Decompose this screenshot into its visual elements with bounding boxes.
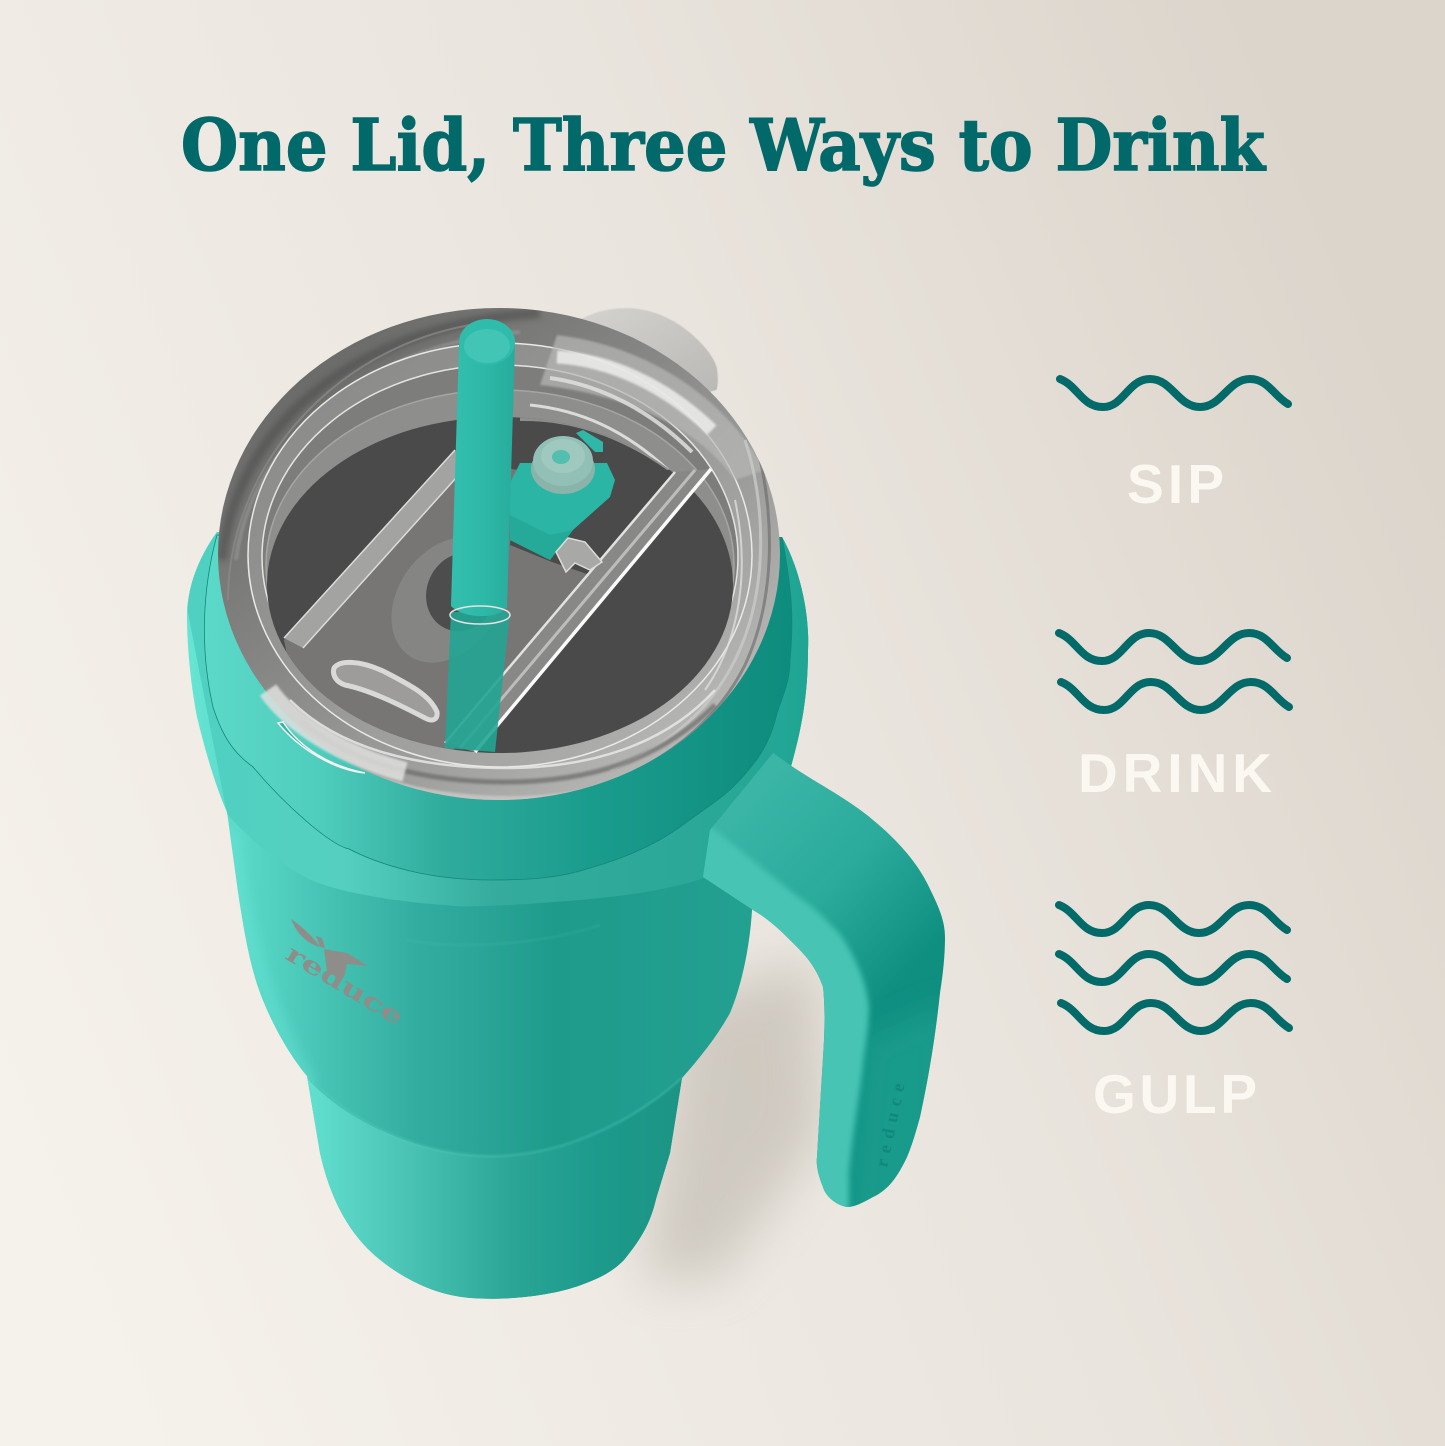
lid: [218, 308, 780, 800]
sip indicator: [1060, 379, 1288, 515]
dark inner cup view: [267, 417, 733, 753]
lid rim: [218, 308, 780, 800]
upper glass band: [520, 418, 670, 470]
drink label: DRINK: [1078, 742, 1272, 804]
inner collar recess: [204, 535, 792, 880]
reduce logo: [281, 919, 409, 1031]
sip label: SIP: [1127, 453, 1224, 515]
drinking hole rim: [368, 516, 528, 684]
lower taper section: [308, 1076, 684, 1299]
bright upper-right glass arcs: [557, 357, 712, 430]
bottom rim lip: [367, 771, 584, 800]
gulp wave icon: [1059, 905, 1289, 1031]
sip wave icon: [1060, 379, 1288, 407]
rim dark top-left streaks: [222, 313, 540, 560]
right rim streaks: [610, 440, 761, 770]
floor shadow: [640, 960, 825, 1280]
tumbler product illustration: [170, 308, 950, 1320]
drink indicator: [1059, 633, 1289, 804]
body left highlight: [232, 830, 310, 1085]
lower latch detail: [333, 662, 437, 720]
tumbler handle: [695, 753, 950, 1230]
handle lower shade: [845, 1000, 940, 1207]
glass centre strip: [284, 460, 590, 760]
drink wave icon: [1059, 633, 1289, 710]
silicone stopper: [510, 430, 615, 560]
gulp label: GULP: [1093, 1063, 1257, 1125]
tumbler body: [170, 520, 825, 1320]
title: One Lid, Three Ways to Drink: [181, 103, 1267, 187]
right diagonal channel: [445, 469, 711, 752]
gulp indicator: [1059, 905, 1289, 1125]
teal gap below lid: [278, 722, 365, 773]
slider clip: [556, 538, 602, 572]
lower-left clasp highlight: [268, 690, 405, 772]
lid pull tab: [568, 308, 718, 393]
left channel: [284, 450, 465, 648]
upper-right glass fill: [540, 335, 765, 480]
straw visible through lid: [445, 612, 510, 752]
reduce logo: reduce: [281, 938, 409, 1031]
collar band: [170, 520, 825, 906]
drinking straw: [450, 319, 515, 624]
handle light side face: [695, 826, 869, 1215]
handle engraved mark: reduce: [871, 1082, 909, 1169]
